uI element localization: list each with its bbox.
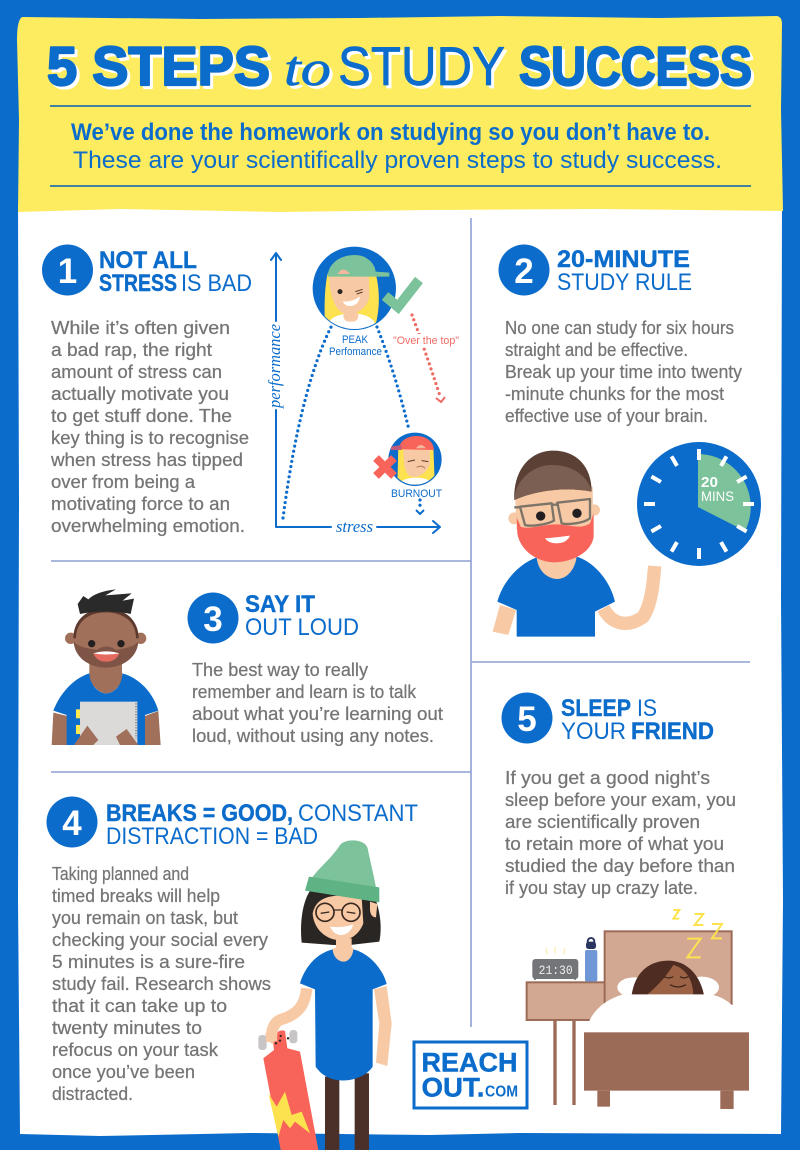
body text 5: if you stay up crazy late. — [505, 878, 698, 898]
body text 2 — [505, 318, 742, 426]
icon: skater girl — [258, 840, 392, 1150]
icon: man with notebook — [52, 589, 161, 745]
body text 3: loud, without using any notes. — [192, 726, 434, 746]
burnout label: BURNOUT — [391, 488, 442, 500]
body text 4: distracted. — [52, 1084, 133, 1104]
icon: sleeping in bed — [527, 910, 749, 1109]
subtitle — [71, 119, 722, 174]
title: to — [284, 40, 331, 96]
number badge 4 — [46, 796, 98, 848]
body text 4: twenty minutes to — [52, 1018, 202, 1038]
number badge 4: 4 — [62, 804, 82, 843]
peak label — [329, 334, 382, 358]
body text 4: you remain on task, but — [52, 908, 238, 928]
icon: green check — [385, 280, 419, 307]
heading 2: 20-MINUTE — [557, 246, 690, 273]
body text 5 — [505, 768, 736, 898]
body text 5: studied the day before than — [505, 856, 735, 876]
number badge 3 — [188, 592, 238, 644]
body text 2: No one can study for six hours — [505, 318, 734, 338]
heading 5: SLEEP — [561, 695, 631, 722]
body text 3: about what you’re learning out — [192, 704, 443, 724]
heading 3 — [245, 591, 359, 641]
heading 2: STUDY RULE — [557, 269, 692, 296]
peak label: Perfomance — [329, 346, 382, 358]
panel: yellow header — [17, 16, 783, 212]
number badge 2 — [498, 244, 550, 296]
icon: clock — [637, 442, 761, 566]
number badge 5: 5 — [517, 700, 537, 739]
number badge 3: 3 — [203, 600, 223, 639]
body text 1: a bad rap, the right — [51, 340, 212, 360]
heading 4: DISTRACTION = BAD — [106, 823, 318, 850]
body text 4: once you’ve been — [52, 1062, 195, 1082]
heading 5: FRIEND — [631, 718, 714, 745]
heading 1: NOT ALL — [99, 247, 197, 274]
body text 1 — [50, 318, 249, 536]
over the top arrow — [412, 315, 445, 402]
body text 4: checking your social every — [52, 930, 268, 950]
number badge 5 — [502, 692, 552, 744]
body text 1: overwhelming emotion. — [51, 516, 245, 536]
icon: peak face — [313, 247, 396, 337]
body text 3 — [192, 660, 443, 746]
icon: clock: 20 — [701, 474, 718, 491]
body text 1: amount of stress can — [51, 362, 222, 382]
body text 2: effective use of your brain. — [505, 406, 708, 426]
body text 5: are scientifically proven — [505, 812, 700, 832]
number badge 1 — [42, 244, 93, 296]
subtitle: These are your scientifically proven steps to study success. — [73, 147, 722, 174]
icon: burnout face — [388, 433, 442, 492]
heading 4: BREAKS = GOOD, — [106, 800, 293, 827]
heading 4 — [106, 800, 418, 850]
body text 2: -minute chunks for the most — [505, 384, 724, 404]
body text 1: over from being a — [51, 472, 196, 492]
body text 2: Break up your time into twenty — [505, 362, 742, 382]
body text 4: study fail. Research shows — [52, 974, 271, 994]
body text 1: when stress has tipped — [50, 450, 243, 470]
logo: reach out — [414, 1042, 527, 1108]
over the top label: "Over the top" — [393, 335, 459, 347]
body text 1: motivating force to an — [51, 494, 230, 514]
title: 5 STEPS — [47, 35, 270, 97]
body text 4: Taking planned and — [52, 864, 189, 884]
body text 4: that it can take up to — [52, 996, 227, 1016]
icon: red cross — [376, 458, 394, 476]
heading 1: STRESS — [99, 270, 177, 297]
axis label performance: performance — [265, 324, 284, 409]
title — [47, 35, 752, 97]
heading 1: IS BAD — [181, 270, 252, 297]
heading 4: CONSTANT — [298, 800, 418, 827]
chart: stress vs performance — [265, 247, 460, 536]
heading 2 — [557, 246, 692, 296]
number badge 2: 2 — [514, 252, 534, 291]
body text 3: The best way to really — [192, 660, 368, 680]
logo: reach out: COM — [485, 1084, 518, 1100]
section 5: sleep is your friend — [502, 692, 749, 1109]
body text 1: While it’s often given — [51, 318, 230, 338]
heading 5: YOUR — [561, 718, 626, 745]
body text 4: refocus on your task — [52, 1040, 219, 1060]
body text 3: remember and learn is to talk — [192, 682, 417, 702]
body text 2: straight and be effective. — [505, 340, 688, 360]
section 2: 20-minute study rule — [493, 244, 761, 637]
logo: reach out: REACH — [422, 1048, 518, 1078]
body text 1: key thing is to recognise — [51, 428, 249, 448]
body text 4: 5 minutes is a sure-fire — [52, 952, 245, 972]
icon: sleeping in bed: 21:30 — [539, 964, 573, 979]
body text 4: timed breaks will help — [52, 886, 220, 906]
subtitle: We’ve done the homework on studying so you don’t have to. — [71, 119, 710, 146]
heading 5: IS — [637, 695, 657, 722]
body text 5: to retain more of what you — [505, 834, 724, 854]
heading 1 — [99, 247, 252, 297]
body text 5: sleep before your exam, you — [505, 790, 736, 810]
number badge 1: 1 — [58, 252, 77, 291]
axis label stress: stress — [336, 517, 373, 536]
body text 1: to get stuff done. The — [51, 406, 232, 426]
peak label: PEAK — [342, 334, 369, 346]
body text 4 — [52, 864, 271, 1104]
section 3: say it out loud — [52, 589, 443, 746]
icon: clock: MINS — [701, 488, 734, 504]
dotted curve — [283, 327, 420, 518]
heading 3: SAY IT — [245, 591, 315, 618]
section 4: breaks — [46, 796, 418, 1150]
heading 5 — [561, 695, 714, 745]
body text 5: If you get a good night’s — [505, 768, 710, 788]
logo: reach out: OUT. — [422, 1072, 484, 1102]
panel: white page — [18, 205, 783, 1136]
icon: bearded man — [493, 451, 655, 637]
title: STUDY — [338, 35, 505, 97]
title: SUCCESS — [519, 35, 752, 97]
heading 3: OUT LOUD — [245, 614, 359, 641]
section 1: not all stress is bad — [42, 244, 460, 536]
body text 1: actually motivate you — [51, 384, 229, 404]
